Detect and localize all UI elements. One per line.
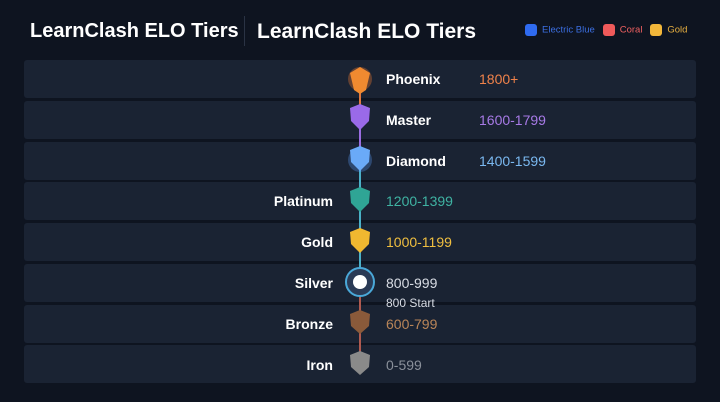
text: Gold [301,234,333,250]
text: Iron [307,357,333,373]
text: Platinum [274,193,333,209]
text: 600-799 [386,316,437,332]
text: 1800+ [479,71,518,87]
text: Diamond [386,153,446,169]
subtitle: LearnClash ELO Tiers [257,20,476,43]
rows [24,60,696,383]
text: Phoenix [386,71,440,87]
title: LearnClash ELO Tiers [30,20,239,42]
text: Master [386,112,431,128]
labels [274,71,546,373]
text: 1600-1799 [479,112,546,128]
text: 800-999 [386,275,437,291]
text: 0-599 [386,357,422,373]
text: 1400-1599 [479,153,546,169]
text: 1200-1399 [386,193,453,209]
legend: Electric Blue Coral Gold [542,25,687,36]
text: Silver [295,275,333,291]
text: 800 Start [386,296,435,310]
text: Bronze [286,316,333,332]
text: 1000-1199 [386,234,452,250]
